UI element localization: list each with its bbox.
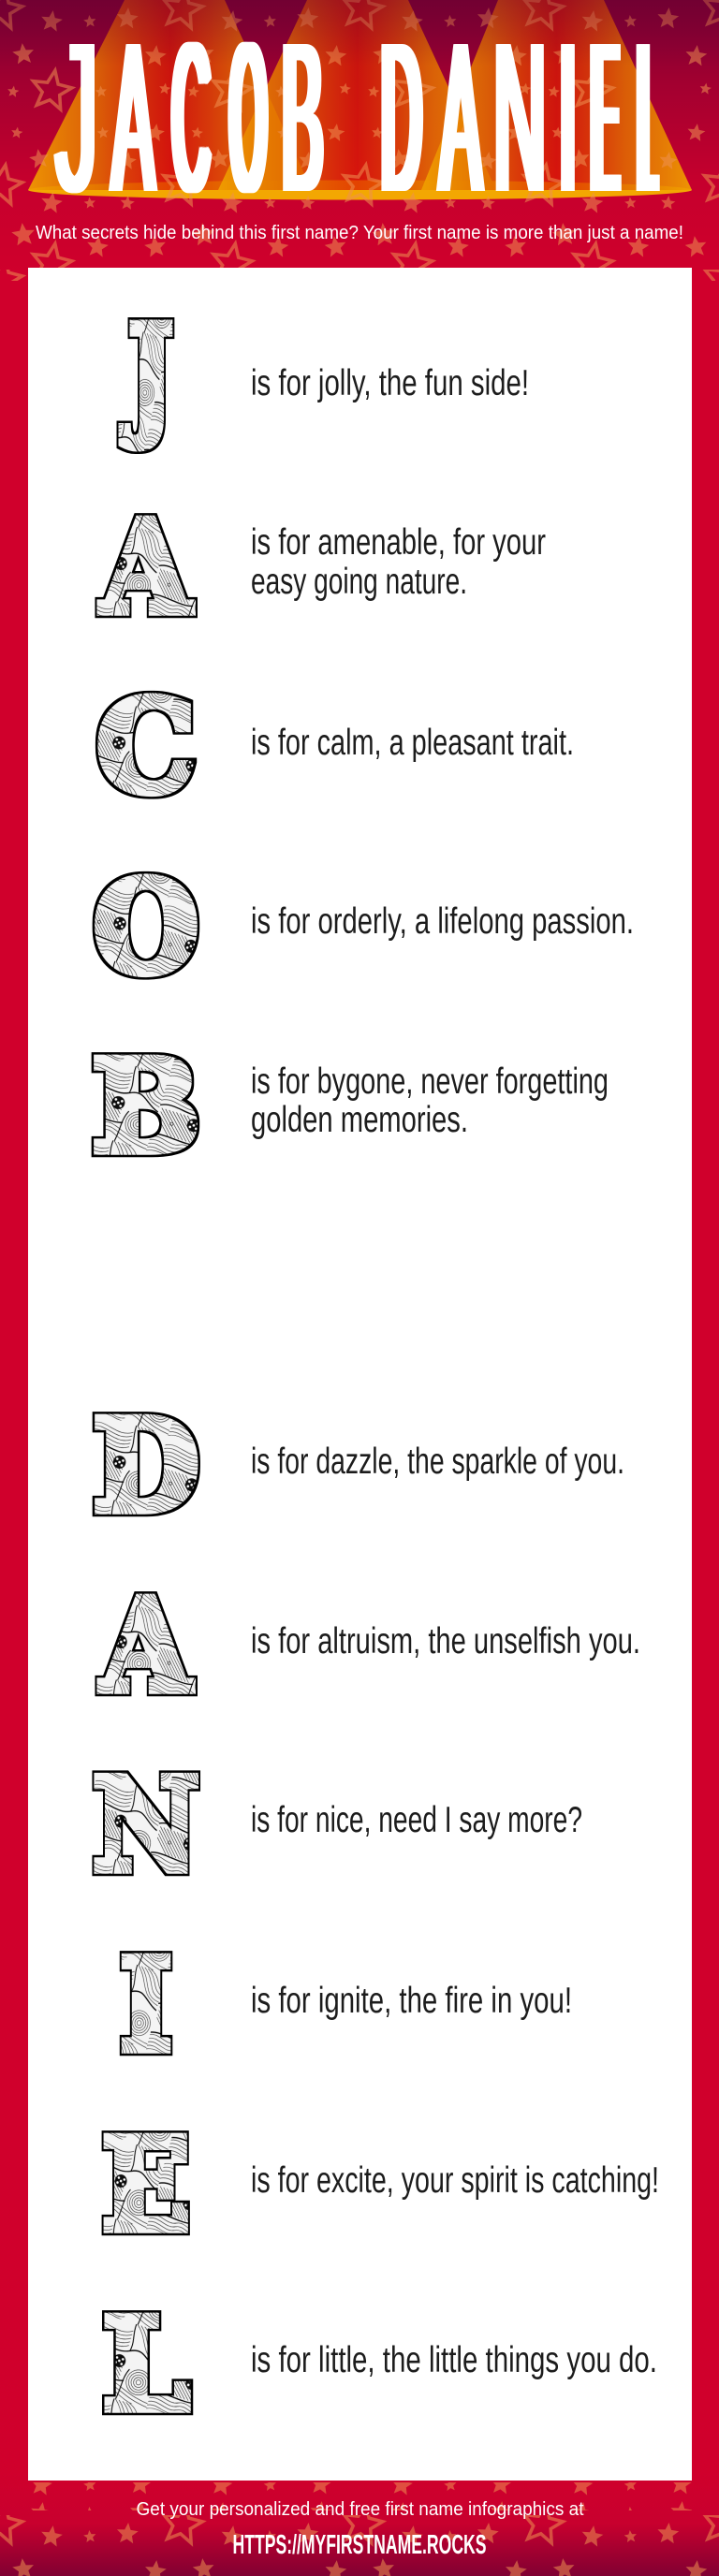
row: B [93, 1032, 609, 1180]
row: A amenable [101, 495, 546, 641]
spotlight middle [218, 0, 496, 190]
icon: letter D: D [94, 1393, 198, 1540]
background stars top [0, 0, 719, 281]
title: B [282, 0, 323, 237]
icon: letter A: A [101, 1573, 192, 1720]
panel: white content area [28, 268, 692, 2481]
row: J [122, 297, 529, 451]
footer link: HTTPS://MYFIRSTNAME.ROCKS [232, 2530, 487, 2560]
title: C [172, 0, 210, 237]
icon: letter I: I [120, 1931, 172, 2079]
icon: letter N: N [93, 1750, 199, 1899]
title: E [592, 0, 618, 237]
title: L [638, 0, 654, 237]
title: N [493, 0, 547, 237]
title: I [559, 0, 577, 237]
spotlight right [421, 0, 692, 190]
row: L [103, 2292, 657, 2438]
background stars footer lower [0, 2515, 719, 2576]
icon: letter E: E [102, 2112, 190, 2259]
spotlight left [28, 0, 312, 190]
row: C [96, 674, 574, 821]
title: D [381, 0, 421, 237]
footer text: Get your personalized and free first name infographics at [137, 2498, 584, 2520]
text: ignite: is for ignite, the fire in you! [251, 1981, 572, 2021]
title [53, 0, 660, 237]
row: O [94, 854, 634, 1001]
icon: letter L: L [103, 2292, 189, 2438]
row: E [102, 2112, 659, 2259]
row: N [93, 1750, 582, 1899]
icon: letter C: C [96, 674, 196, 821]
background: top gradient [0, 0, 719, 281]
text: nice: is for nice, need I say more? [251, 1800, 582, 1840]
icon: letter A: A [101, 495, 192, 641]
title: A [112, 0, 154, 237]
row: A altruism [101, 1573, 640, 1720]
text: amenable line one: is for amenable, for your [251, 522, 546, 563]
title: O [230, 0, 266, 237]
text: jolly: is for jolly, the fun side! [251, 363, 529, 403]
spotlights [28, 0, 692, 200]
row: I [120, 1931, 572, 2079]
icon: letter J: J [122, 297, 173, 451]
icon: letter B: B [93, 1032, 199, 1180]
background: bottom gradient [0, 2471, 719, 2576]
text: calm: is for calm, a pleasant trait. [251, 723, 574, 763]
row: D [94, 1393, 624, 1540]
text: amenable line two: easy going nature. [251, 562, 467, 602]
background stars footer row [0, 2482, 719, 2510]
text: bygone line two: golden memories. [251, 1100, 468, 1140]
top dimming shade [0, 0, 719, 66]
title: J [55, 0, 98, 237]
title: A [440, 0, 481, 237]
spotlight floor glow [28, 180, 692, 200]
icon: letter O: O [94, 854, 198, 1001]
